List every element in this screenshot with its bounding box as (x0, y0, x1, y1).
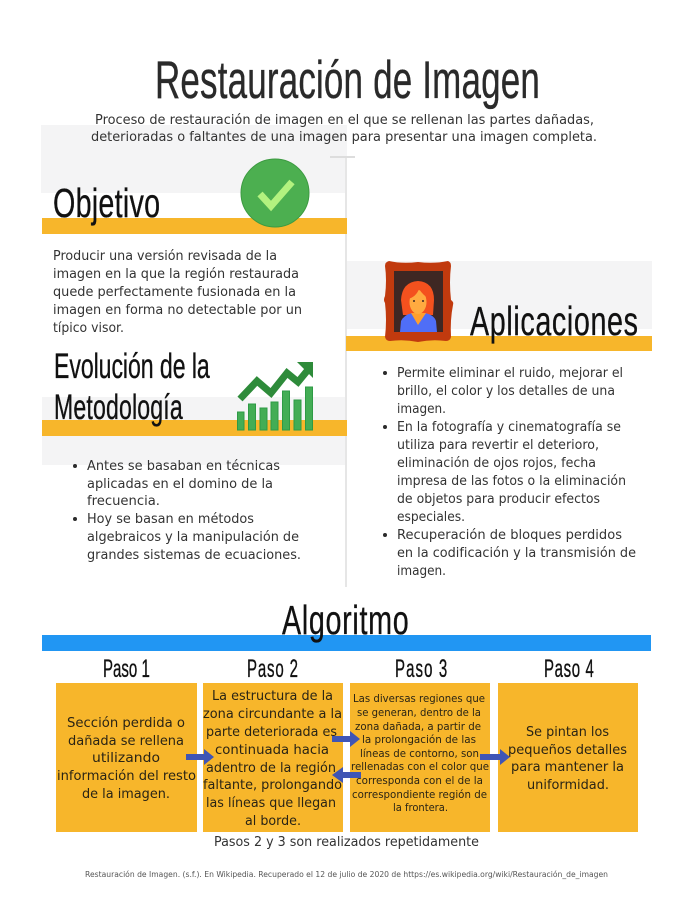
aplicaciones bullets: Recuperación de bloques perdidos (397, 528, 622, 543)
aplicaciones bullets: impresa de las fotos o la eliminación (397, 474, 626, 489)
evolucion bullets: grandes sistemas de ecuaciones. (87, 548, 301, 563)
title: Restauración de Imagen (155, 50, 540, 110)
aplicaciones bullets: eliminación de ojos rojos, fecha (397, 456, 596, 471)
evolucion bullets: Hoy se basan en métodos (87, 512, 254, 527)
paso 2 text: las líneas que llegan (206, 795, 336, 811)
aplicaciones bullets: En la fotografía y cinematografía se (397, 420, 621, 435)
paso 1 text: información del resto (57, 768, 196, 784)
paso 2 text: adentro de la región (206, 760, 336, 776)
intro text: Proceso de restauración de imagen en el que se rellenan las partes dañadas, (95, 113, 594, 128)
paso 1 text: de la imagen. (82, 786, 170, 802)
panel: evolucion (42, 347, 347, 563)
objetivo text: típico visor. (53, 321, 124, 336)
evolucion bar (42, 420, 347, 436)
icon: green check (241, 159, 309, 227)
paso 4 (498, 655, 638, 832)
evolucion heading: Evolución de la (54, 347, 210, 386)
arrow: paso 1 to paso 2 (186, 749, 214, 765)
objetivo text: quede perfectamente fusionada en la (53, 285, 296, 300)
evolucion bullets: frecuencia. (87, 494, 160, 509)
arrow: paso 3 to paso 4 (480, 749, 510, 765)
paso 4 text: uniformidad. (527, 777, 609, 793)
evolucion bullets: aplicadas en el domino de la (87, 477, 273, 492)
icon: growth chart (238, 362, 313, 430)
aplicaciones heading: Aplicaciones (470, 299, 638, 344)
paso 3 text: Las diversas regiones que (353, 692, 485, 705)
aplicaciones bar (346, 336, 652, 351)
paso 3 text (351, 692, 489, 814)
paso 2 text: continuada hacia (215, 742, 329, 758)
paso 2 heading: Paso 2 (247, 655, 298, 683)
paso 2 text: La estructura de la (212, 688, 333, 704)
paso 2 (203, 655, 343, 832)
algoritmo bar (42, 635, 651, 651)
objetivo text: imagen en la que la región restaurada (53, 267, 299, 282)
algoritmo heading: Algoritmo (282, 598, 409, 643)
aplicaciones bullets: en la codificación y la transmisión de (397, 546, 636, 561)
repeat note: Pasos 2 y 3 son realizados repetidamente (214, 835, 479, 850)
icon: framed portrait (384, 261, 453, 342)
paso 3 text: correspondiente región de (352, 788, 487, 801)
panel: objetivo (42, 159, 347, 336)
objetivo heading: Objetivo (53, 181, 160, 226)
aplicaciones bullets: brillo, el color y los detalles de una (397, 384, 615, 399)
aplicaciones bullets: de objetos para producir efectos (397, 492, 600, 507)
citation: Restauración de Imagen. (s.f.). En Wikipedia. Recuperado el 12 de julio de 2020 de https://es.wikipedia.org/wiki/Restauración_de_imagen (85, 869, 608, 879)
aplicaciones bullets: Permite eliminar el ruido, mejorar el (397, 366, 623, 381)
paso 3 text: líneas de contorno, son (360, 747, 479, 760)
evolucion bullets: algebraicos y la manipulación de (87, 530, 299, 545)
aplicaciones bullets: especiales. (397, 510, 465, 525)
aplicaciones bullets: imagen. (397, 564, 446, 579)
paso 1 heading: Paso 1 (103, 655, 150, 683)
paso 4 heading: Paso 4 (544, 655, 594, 683)
paso 2 text: faltante, prolongando (203, 777, 342, 793)
paso 3 text: la frontera. (393, 801, 448, 814)
intro text (91, 113, 597, 145)
arrow: paso 3 to paso 2 (332, 767, 361, 783)
paso 4 text: para mantener la (511, 759, 624, 775)
paso 3 text: la prolongación de las (362, 733, 476, 746)
paso 3 box (350, 683, 490, 832)
aplicaciones bullets: imagen. (397, 402, 446, 417)
evolucion heading: Metodología (54, 388, 183, 427)
paso 1 (56, 655, 197, 832)
objetivo bar (42, 218, 347, 234)
paso 4 text (508, 724, 627, 793)
paso 3 heading: Paso 3 (395, 655, 447, 683)
objetivo text: Producir una versión revisada de la (53, 249, 277, 264)
paso 1 text: utilizando (92, 750, 160, 766)
objetivo text (53, 249, 302, 336)
paso 3 text: se generan, dentro de la (357, 706, 481, 719)
paso 1 text: Sección perdida o (67, 715, 185, 731)
paso 1 box (56, 683, 197, 832)
paso 2 text: parte deteriorada es (206, 724, 337, 740)
panel: aplicaciones (346, 261, 652, 579)
paso 4 box (498, 683, 638, 832)
aplicaciones bullets (383, 366, 636, 579)
paso 4 text: Se pintan los (526, 724, 609, 740)
arrow: paso 2 to paso 3 (332, 731, 360, 747)
paso 1 text (57, 715, 196, 802)
paso 2 box (203, 683, 343, 832)
intro text: deterioradas o faltantes de una imagen para presentar una imagen completa. (91, 130, 597, 145)
paso 2 text: al borde. (245, 813, 301, 829)
paso 4 text: pequeños detalles (508, 742, 627, 758)
paso 3 text: rellenadas con el color que (351, 760, 489, 773)
paso 2 text: zona circundante a la (203, 706, 342, 722)
evolucion bullets: Antes se basaban en técnicas (87, 459, 280, 474)
paso 1 text: dañada se rellena (68, 733, 184, 749)
paso 2 text (203, 688, 342, 829)
evolucion bullets (73, 459, 301, 563)
evolucion heading (54, 347, 210, 427)
objetivo text: imagen en forma no detectable por un (53, 303, 302, 318)
aplicaciones bullets: utiliza para revertir el deterioro, (397, 438, 599, 453)
paso 3 text: corresponda con el de la (356, 774, 483, 787)
paso 3 (350, 655, 490, 832)
paso 3 text: zona dañada, a partir de (355, 720, 481, 733)
